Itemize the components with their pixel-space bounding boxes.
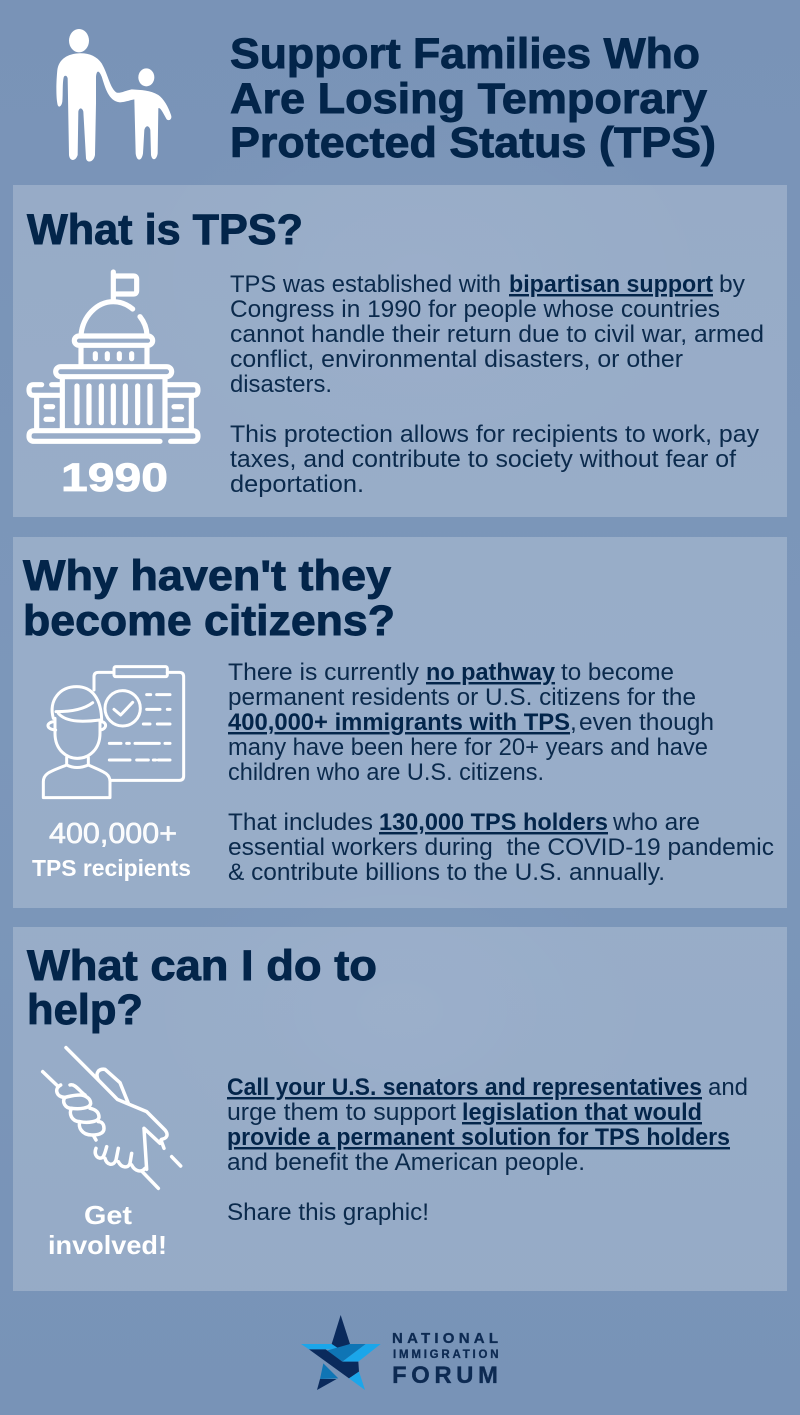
icon: capitol building [29, 272, 198, 441]
heading: what can I do to help: help? [27, 986, 143, 1034]
label: 400,000+ TPS recipients [32, 818, 191, 881]
panel: what is TPS [13, 185, 787, 517]
heading: why haven't they become citizens: Why haven't they [23, 552, 391, 600]
heading: what is TPS: What is TPS? [27, 206, 303, 254]
text: call your representatives: legislation that would [462, 1099, 702, 1126]
text: no pathway: , [570, 709, 577, 736]
text: call your representatives: provide a permanent solution for TPS holders [227, 1124, 730, 1151]
text: no pathway: even though [579, 709, 714, 736]
text: TPS origin: disasters. [230, 371, 332, 398]
text: essential workers [228, 809, 774, 886]
text: no pathway: many have been here for 20+ years and have [228, 734, 708, 761]
text: logo wordmark: IMMIGRATION [393, 1349, 498, 1361]
text: no pathway: to become [561, 659, 674, 686]
label: 400,000+ TPS recipients: TPS recipients [32, 855, 191, 881]
icon: adult and child holding hands [56, 29, 171, 162]
label: get involved [48, 1200, 167, 1260]
text: logo wordmark: NATIONAL [392, 1330, 498, 1347]
label: get involved: involved! [48, 1230, 167, 1260]
text: share this graphic: Share this graphic! [227, 1199, 429, 1226]
text: TPS origin: TPS was established with [230, 271, 501, 298]
text: no pathway: permanent residents or U.S. citizens for the [228, 684, 696, 711]
heading: why haven't they become citizens [23, 552, 395, 645]
text: TPS origin: by [719, 271, 746, 298]
text: TPS protection: taxes, and contribute to society without fear of [230, 446, 736, 473]
title: Support Families Who [230, 30, 700, 78]
text: TPS origin: Congress in 1990 for people whose countries [230, 296, 720, 323]
text: essential workers: That includes [228, 809, 373, 836]
text: call your representatives: Call your U.S. senators and representatives [227, 1074, 702, 1101]
text: call your representatives: and benefit the American people. [227, 1149, 585, 1176]
icon: person with checklist [43, 667, 184, 798]
text: essential workers: who are [612, 809, 700, 836]
text: TPS protection: deportation. [230, 471, 364, 498]
label: get involved: Get [84, 1200, 132, 1230]
text: essential workers: 130,000 TPS holders [379, 809, 608, 836]
text: logo wordmark: FORUM [392, 1362, 498, 1389]
icon: logo star [301, 1315, 381, 1390]
title: Are Losing Temporary [230, 75, 707, 123]
text: logo wordmark [392, 1330, 498, 1389]
text: essential workers: essential workers during the COVID-19 pandemic [228, 834, 774, 861]
text: TPS origin: conflict, environmental disasters, or other [230, 346, 683, 373]
panel: what can I do to help [13, 927, 787, 1291]
text: no pathway [228, 659, 714, 786]
heading: what can I do to help: What can I do to [27, 942, 377, 990]
title [230, 30, 716, 167]
text: call your representatives: and [708, 1074, 748, 1101]
text: TPS origin: cannot handle their return due to civil war, armed [230, 321, 764, 348]
icon: helping hands [43, 1048, 181, 1188]
text: call your representatives [227, 1074, 748, 1176]
text: TPS origin [230, 271, 764, 398]
text: essential workers: & contribute billions to the U.S. annually. [228, 859, 665, 886]
header [56, 29, 716, 167]
logo: National Immigration Forum [301, 1315, 498, 1390]
text: TPS protection: This protection allows for recipients to work, pay [230, 421, 760, 448]
text: no pathway: 400,000+ immigrants with TPS [228, 709, 570, 736]
label: 400,000+ TPS recipients: 400,000+ [49, 818, 177, 850]
panel: why haven't they become citizens [13, 537, 787, 908]
text: no pathway: There is currently [228, 659, 420, 686]
text: TPS origin: bipartisan support [509, 271, 713, 298]
text: no pathway: children who are U.S. citizens. [228, 759, 544, 786]
text: no pathway: no pathway [426, 659, 555, 686]
heading: why haven't they become citizens: become citizens? [23, 597, 395, 645]
label: 1990: 1990 [61, 456, 168, 500]
text: call your representatives: urge them to support [227, 1099, 456, 1126]
text: TPS protection [230, 421, 760, 498]
heading: what can I do to help [27, 942, 377, 1034]
title: Protected Status (TPS) [230, 119, 716, 167]
